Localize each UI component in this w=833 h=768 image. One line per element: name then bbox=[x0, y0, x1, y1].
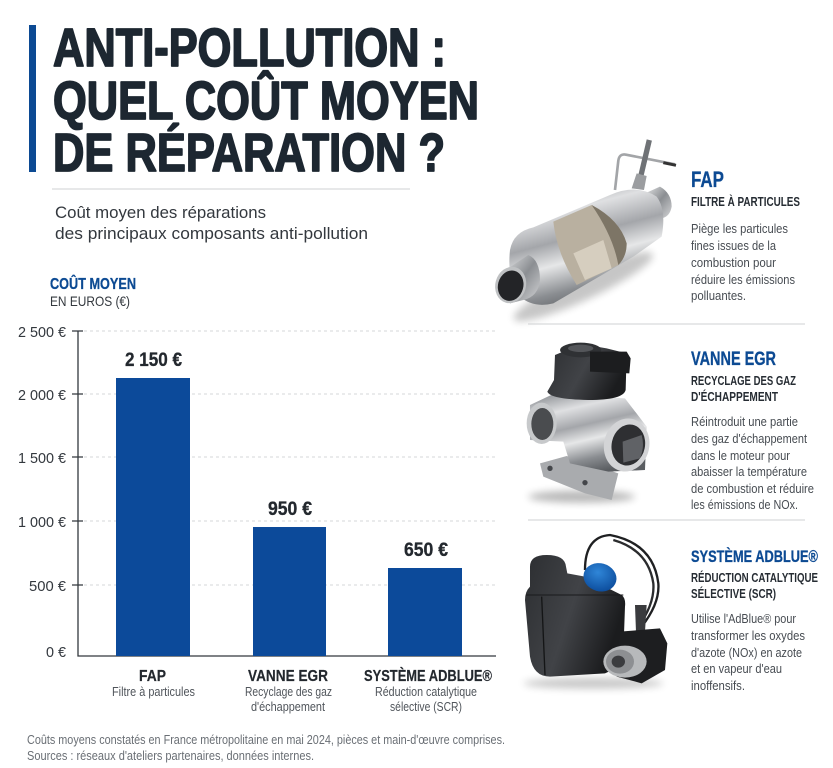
title: DE RÉPARATION ? bbox=[53, 123, 445, 183]
panel: Vanne EGR description: D'ÉCHAPPEMENT bbox=[691, 389, 778, 404]
panel: FAP description: FAP bbox=[691, 167, 724, 192]
panel: FAP description bbox=[691, 167, 800, 303]
value: FAP: 2 150 € bbox=[125, 350, 182, 371]
panel: FAP description: Piège les particules bbox=[691, 221, 788, 236]
y axis labels: 500 € bbox=[29, 578, 67, 595]
panel: Vanne EGR description: des gaz d'échappement bbox=[691, 431, 807, 446]
category label: Vanne EGR: VANNE EGR bbox=[248, 668, 328, 685]
subtitle: des principaux composants anti-pollution bbox=[55, 224, 368, 243]
panel: Vanne EGR description: abaisser la température bbox=[691, 464, 807, 479]
icon: FAP particulate filter bbox=[491, 140, 676, 331]
footnote: Sources : réseaux d'ateliers partenaires, données internes. bbox=[27, 749, 314, 763]
panel: Système AdBlue description: d'azote (NOx) en azote bbox=[691, 645, 802, 660]
panel: FAP description: polluantes. bbox=[691, 288, 746, 303]
category label: Vanne EGR: Recyclage des gaz bbox=[245, 685, 332, 699]
panel: Système AdBlue description: Utilise l'AdBlue® pour bbox=[691, 611, 797, 626]
title: ANTI-POLLUTION : bbox=[53, 18, 446, 78]
panel: Système AdBlue description: inoffensifs. bbox=[691, 678, 745, 693]
category label: Système AdBlue bbox=[364, 666, 492, 714]
value: Vanne EGR: 950 € bbox=[268, 499, 312, 520]
bar: Vanne EGR bbox=[253, 527, 326, 656]
category label: Système AdBlue: sélective (SCR) bbox=[390, 700, 462, 714]
panel: Vanne EGR description: les émissions de NOx. bbox=[691, 497, 798, 512]
title accent bar bbox=[29, 25, 36, 172]
panel: Vanne EGR description: RECYCLAGE DES GAZ bbox=[691, 373, 796, 388]
subtitle: Coût moyen des réparations bbox=[55, 203, 266, 222]
value: Système AdBlue: 650 € bbox=[404, 540, 448, 561]
category label: Vanne EGR: d'échappement bbox=[251, 700, 325, 714]
panel: Vanne EGR description: VANNE EGR bbox=[691, 349, 776, 370]
panel: Système AdBlue description: transformer les oxydes bbox=[691, 628, 805, 643]
category label: FAP bbox=[112, 668, 195, 699]
subtitle bbox=[55, 203, 368, 243]
panel: Vanne EGR description bbox=[691, 349, 814, 512]
title: QUEL COÛT MOYEN bbox=[53, 70, 479, 131]
panel: Système AdBlue description: SÉLECTIVE (SCR) bbox=[691, 586, 776, 601]
category label: Système AdBlue: Réduction catalytique bbox=[375, 685, 477, 699]
footnote bbox=[27, 733, 505, 763]
panel: Vanne EGR description: Réintroduit une partie bbox=[691, 414, 798, 429]
y axis labels: 2 500 € bbox=[18, 324, 67, 341]
icon: AdBlue system bbox=[523, 535, 667, 689]
y axis bbox=[72, 331, 496, 656]
footnote: Coûts moyens constatés en France métropolitaine en mai 2024, pièces et main-d'œuvre comprises. bbox=[27, 733, 505, 747]
y axis labels: 1 500 € bbox=[18, 450, 67, 467]
panel: FAP description: fines issues de la bbox=[691, 238, 777, 253]
panel: Système AdBlue description: et en vapeur d'eau bbox=[691, 661, 782, 676]
category label: Système AdBlue: SYSTÈME ADBLUE® bbox=[364, 666, 492, 685]
panel: FAP description: combustion pour bbox=[691, 255, 777, 270]
title bbox=[53, 18, 479, 183]
y axis labels: 0 € bbox=[46, 644, 67, 661]
bar: Système AdBlue bbox=[388, 568, 462, 656]
chart axis title: COÛT MOYEN bbox=[50, 274, 136, 293]
panel: FAP description: réduire les émissions bbox=[691, 272, 795, 287]
y axis labels bbox=[18, 324, 67, 661]
bar chart bbox=[18, 274, 496, 714]
y axis labels: 1 000 € bbox=[18, 514, 67, 531]
category label: FAP: FAP bbox=[139, 668, 166, 685]
chart axis title bbox=[50, 274, 136, 309]
y axis labels: 2 000 € bbox=[18, 387, 67, 404]
category label: FAP: Filtre à particules bbox=[112, 685, 195, 699]
panel: Vanne EGR description: de combustion et réduire bbox=[691, 481, 814, 496]
icon: EGR valve bbox=[527, 343, 654, 503]
bar: FAP bbox=[116, 378, 190, 656]
panel: FAP description: FILTRE À PARTICULES bbox=[691, 194, 800, 209]
chart axis title: EN EUROS (€) bbox=[50, 293, 130, 309]
panel: Système AdBlue description bbox=[691, 547, 818, 693]
panel: Vanne EGR description: dans le moteur pour bbox=[691, 448, 791, 463]
category label: Vanne EGR bbox=[245, 668, 332, 714]
